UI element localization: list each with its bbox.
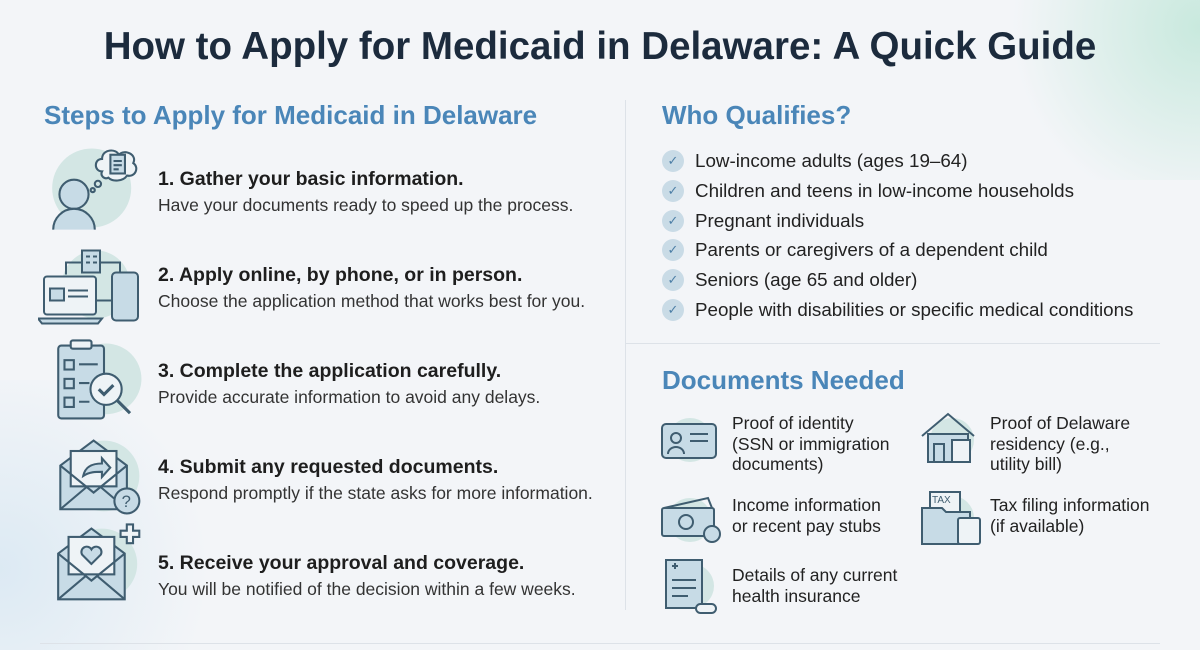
list: qualifies: Seniors (age 65 and older) — [695, 269, 917, 290]
doc: insurance: Details of any current — [732, 565, 897, 585]
heading: who qualifies: Who Qualifies? — [662, 100, 851, 130]
list: qualifies: Parents or caregivers of a dependent child — [695, 239, 1048, 260]
icon: person thinking — [52, 148, 138, 230]
icon: id card — [661, 418, 717, 462]
list: qualifies: ✓ — [668, 213, 678, 228]
doc: tax: (if available) — [990, 516, 1084, 536]
list: qualifies: ✓ — [668, 183, 678, 198]
doc: income: Income information — [732, 495, 881, 515]
doc: identity: Proof of identity — [732, 413, 854, 433]
list: qualifies: ✓ — [668, 272, 678, 287]
title: How to Apply for Medicaid in Delaware: A Quick Guide — [104, 25, 1096, 68]
heading: steps: Steps to Apply for Medicaid in Delaware — [44, 100, 537, 130]
list: qualifies: People with disabilities or specific medical conditions — [695, 299, 1133, 320]
icon: tax folder — [921, 491, 981, 545]
icon: envelope heart — [57, 523, 140, 600]
doc: income: or recent pay stubs — [732, 516, 881, 536]
step 3: Provide accurate information to avoid any delays. — [158, 387, 540, 407]
doc: residency: Proof of Delaware — [990, 413, 1130, 433]
step 4: 4. Submit any requested documents. — [158, 456, 498, 478]
icon: money — [661, 496, 721, 543]
doc: insurance: health insurance — [732, 586, 860, 606]
doc: income — [732, 495, 881, 536]
step 5 — [158, 552, 576, 599]
step 2 — [158, 264, 585, 311]
list: qualifies: ✓ — [668, 302, 678, 317]
doc: residency: residency (e.g., — [990, 434, 1110, 454]
icon: tax folder: TAX — [932, 495, 951, 506]
panel: documents needed — [661, 365, 1150, 614]
list: qualifies: ✓ — [668, 153, 678, 168]
list: qualifies: Low-income adults (ages 19–64) — [695, 150, 967, 171]
step 2: Choose the application method that works best for you. — [158, 291, 585, 311]
icon: devices — [38, 250, 139, 324]
step 3: 3. Complete the application carefully. — [158, 360, 501, 382]
step 5: You will be notified of the decision within a few weeks. — [158, 579, 576, 599]
step 1: 1. Gather your basic information. — [158, 168, 464, 190]
doc: identity — [732, 413, 890, 474]
icon: clipboard — [57, 339, 142, 420]
doc: tax: Tax filing information — [990, 495, 1150, 515]
step 1: Have your documents ready to speed up the process. — [158, 195, 573, 215]
step 3 — [158, 360, 540, 407]
icon: insurance doc — [665, 559, 717, 614]
icon: envelope question — [59, 439, 140, 514]
step 4: Respond promptly if the state asks for more information. — [158, 483, 593, 503]
list: qualifies: Children and teens in low-income households — [695, 180, 1074, 201]
doc: tax — [990, 495, 1150, 536]
step 5: 5. Receive your approval and coverage. — [158, 552, 524, 574]
step 4 — [158, 456, 593, 503]
doc: residency — [990, 413, 1130, 474]
icon: house — [921, 412, 975, 463]
panel: steps — [38, 100, 593, 600]
step 2: 2. Apply online, by phone, or in person. — [158, 264, 522, 286]
doc: insurance — [732, 565, 898, 606]
list: qualifies: Pregnant individuals — [695, 210, 864, 231]
heading: documents: Documents Needed — [662, 365, 905, 395]
doc: identity: (SSN or immigration — [732, 434, 890, 454]
doc: residency: utility bill) — [990, 454, 1062, 474]
list: qualifies — [662, 150, 1133, 321]
step 1 — [158, 168, 573, 215]
doc: identity: documents) — [732, 454, 823, 474]
icon: envelope question: ? — [122, 492, 131, 511]
list: qualifies: ✓ — [668, 242, 678, 257]
